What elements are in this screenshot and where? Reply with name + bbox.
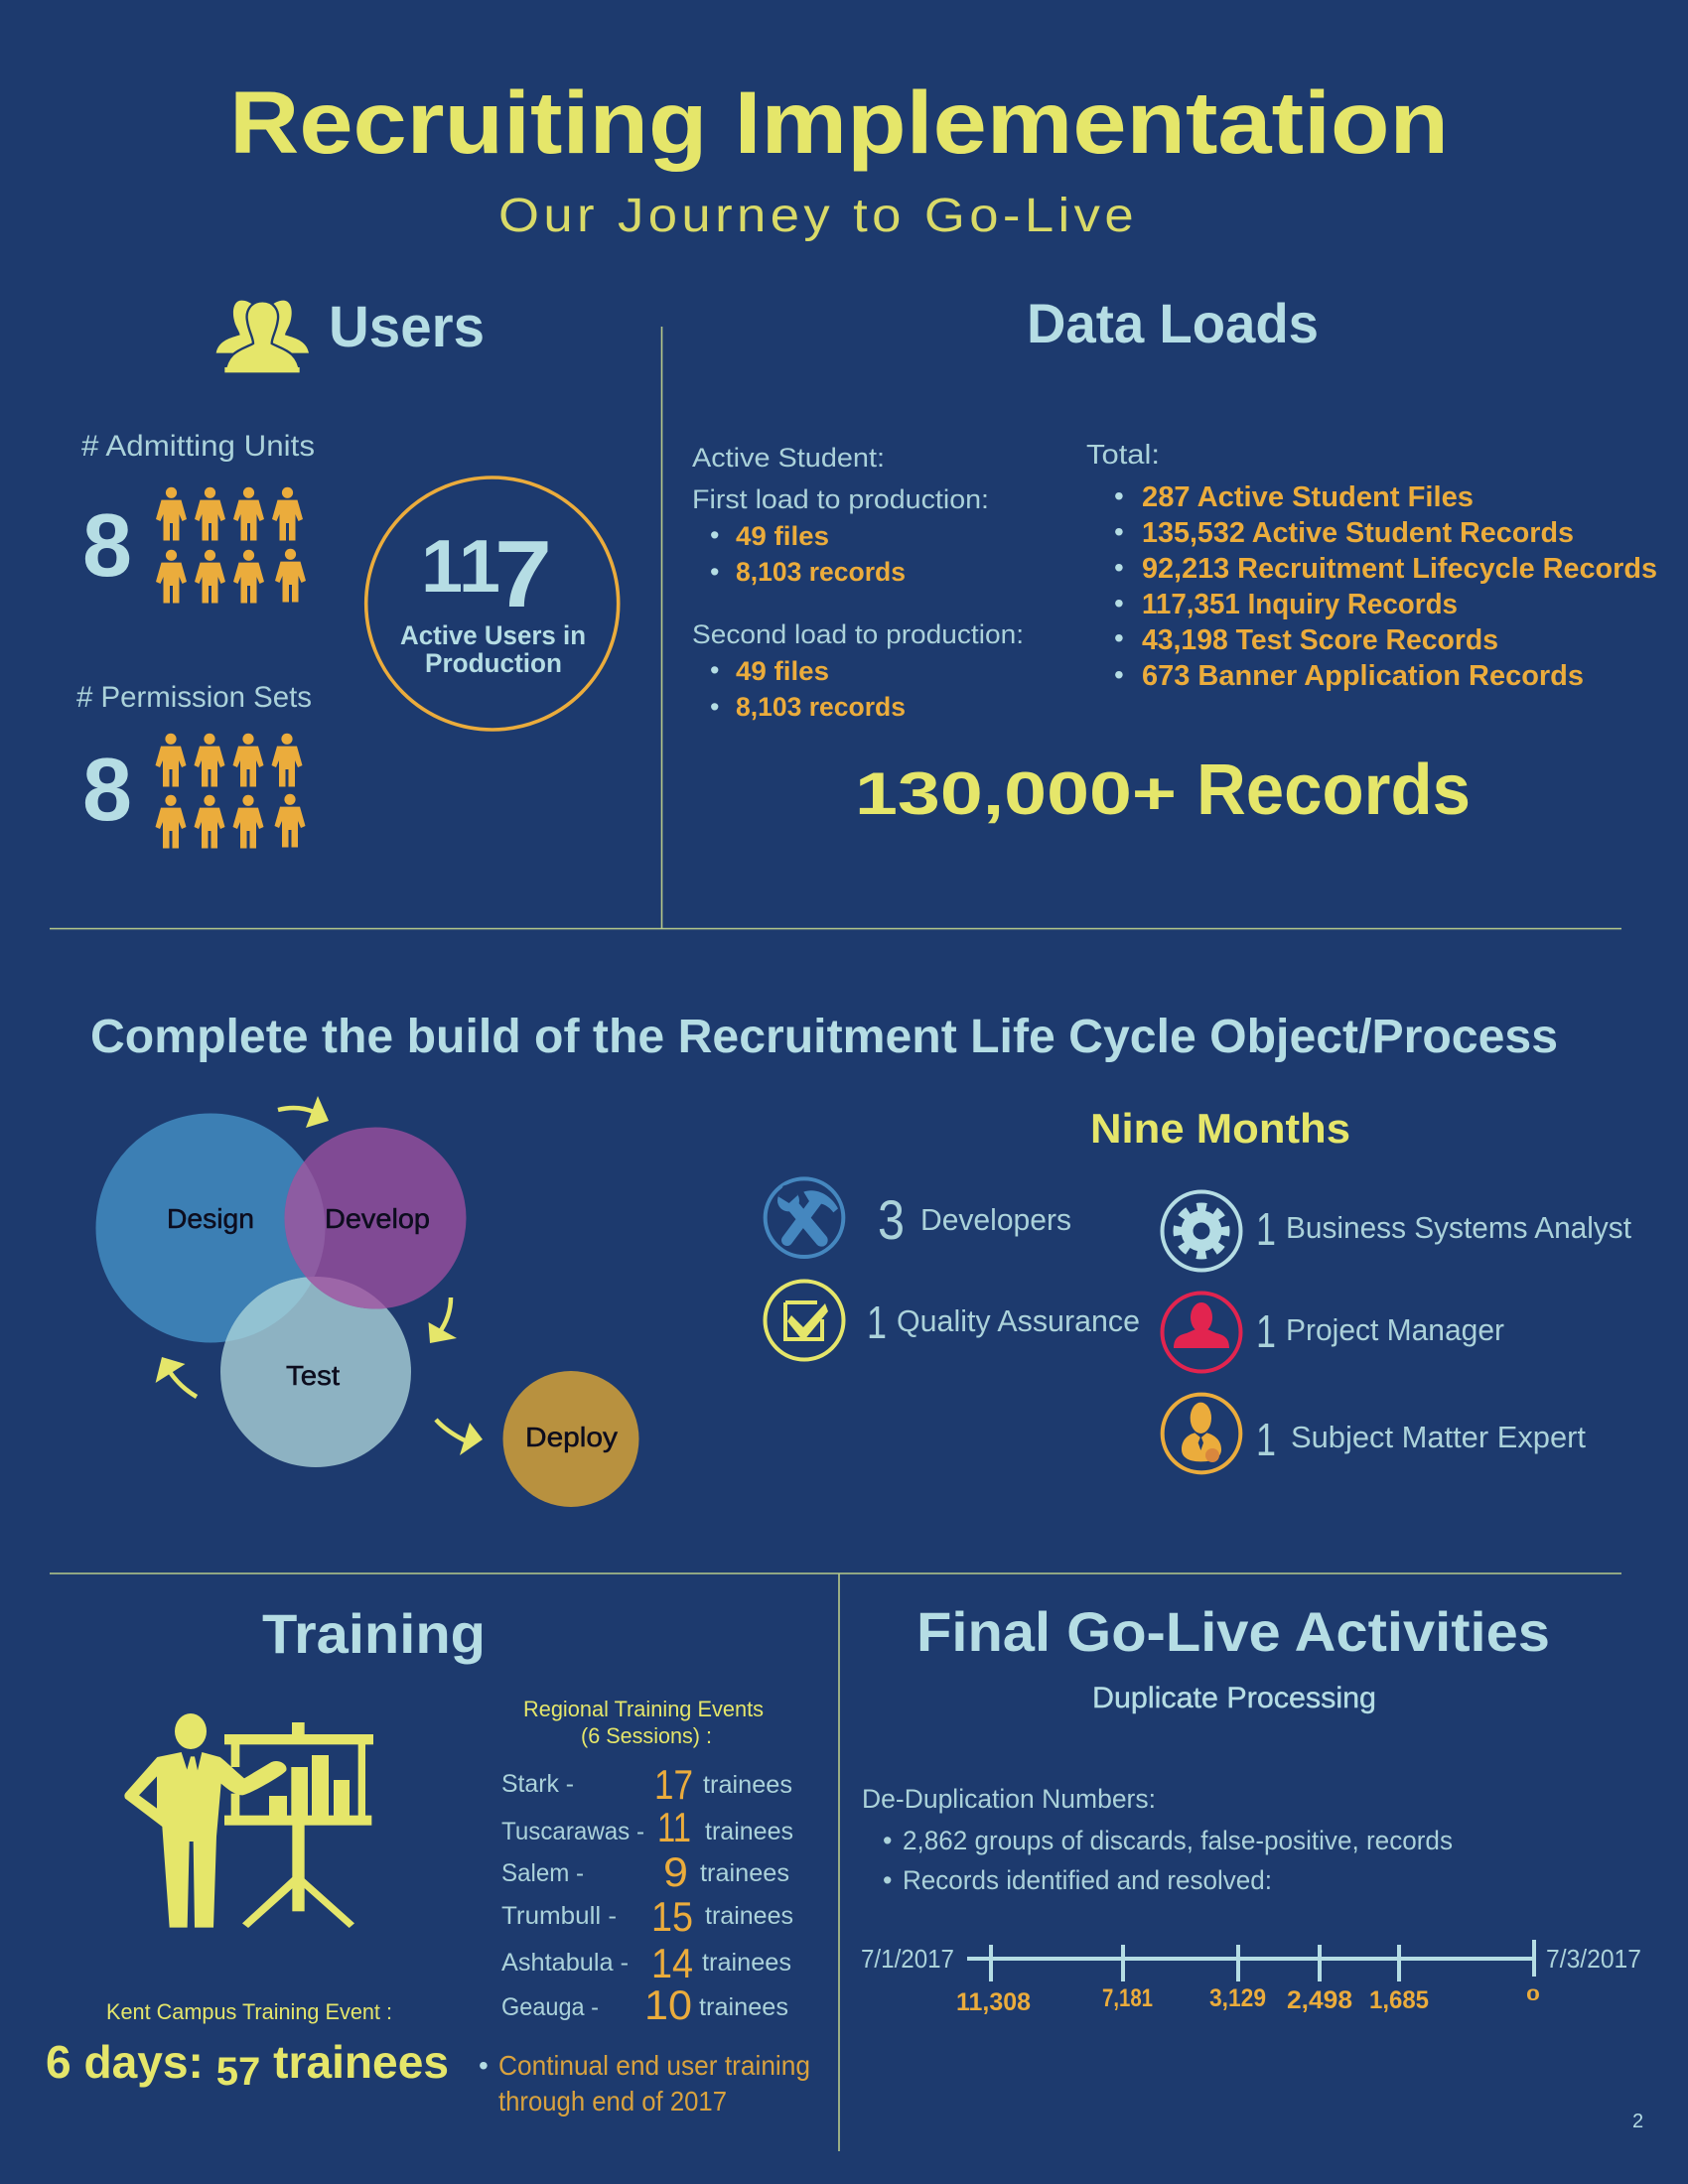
text block: active student: •	[710, 557, 719, 587]
text block: active student	[692, 443, 1024, 722]
role: subject matter expert	[1256, 1414, 1586, 1465]
chart: timeline: 7/1/2017	[861, 1944, 954, 1974]
big number: records	[855, 751, 1471, 830]
circle: test	[220, 1277, 411, 1467]
subheading: duplicate processing: Duplicate Processing	[1092, 1682, 1376, 1714]
text block: totals: 117,351 Inquiry Records	[1142, 589, 1458, 620]
heading: nine months: Nine Months	[1090, 1105, 1350, 1152]
overlap: design and test	[225, 1277, 312, 1342]
kent campus label: Kent Campus Training Event :	[106, 1999, 392, 2024]
table: regional sessions: Trumbull -	[501, 1902, 617, 1930]
text block: totals: 673 Banner Application Records	[1142, 660, 1584, 692]
note: continual training: Continual end user training	[498, 2050, 810, 2081]
text block: active student: •	[710, 692, 719, 722]
role: quality assurance	[867, 1297, 1140, 1348]
page number: 2	[1632, 2111, 1643, 2132]
overlap: design and develop	[284, 1161, 326, 1283]
heading: users: Users	[329, 295, 485, 359]
number: permission sets: 8	[82, 741, 132, 840]
icon: project manager	[1162, 1293, 1241, 1372]
text block: de-duplication: •	[883, 1865, 892, 1895]
text block: de-duplication: •	[883, 1826, 892, 1855]
big number: records: Records	[1196, 751, 1471, 830]
arrow: develop to test	[429, 1297, 457, 1343]
table: regional sessions	[501, 1761, 793, 2028]
panel: team	[765, 1105, 1631, 1472]
text block: de-duplication: De-Duplication Numbers:	[862, 1784, 1156, 1814]
regional events heading: Regional Training Events	[523, 1697, 764, 1721]
venn labels: Deploy	[525, 1422, 618, 1452]
chart: timeline: 0	[1526, 1985, 1540, 2004]
role: quality assurance: Quality Assurance	[897, 1303, 1140, 1338]
table: regional sessions: trainees	[705, 1902, 793, 1930]
text block: totals: 135,532 Active Student Records	[1142, 517, 1574, 549]
table: regional sessions: Ashtabula -	[501, 1949, 629, 1977]
chart: timeline: 3,129	[1209, 1984, 1266, 2012]
table: regional sessions: trainees	[703, 1771, 792, 1799]
number: admitting units: 8	[82, 496, 132, 596]
table: regional sessions: 11	[657, 1804, 691, 1850]
table: regional sessions: trainees	[705, 1818, 793, 1845]
table: regional sessions: Stark -	[501, 1770, 574, 1798]
big number: kent campus: 57	[216, 2050, 260, 2094]
icon: gear	[1162, 1191, 1241, 1271]
chart: timeline: 7,181	[1102, 1984, 1153, 2012]
table: regional sessions: Geauga -	[501, 1993, 599, 2021]
chart: timeline: 2,498	[1287, 1986, 1352, 2014]
text block: totals: Total:	[1086, 439, 1160, 470]
regional events heading	[523, 1697, 764, 1748]
role: quality assurance: 1	[867, 1297, 887, 1348]
circle: design	[95, 1114, 326, 1342]
icon: developers tools	[766, 1178, 843, 1257]
table: regional sessions: trainees	[702, 1949, 791, 1977]
text block: active student: Second load to production:	[692, 619, 1024, 649]
heading: recruitment life cycle: Complete the build of the Recruitment Life Cycle Object/Process	[90, 1011, 1558, 1063]
table: regional sessions: 15	[651, 1893, 693, 1940]
role: developers: 3	[878, 1188, 905, 1251]
text block: totals: 287 Active Student Files	[1142, 481, 1474, 513]
panel: data loads	[692, 292, 1657, 830]
panel: final go-live	[861, 1600, 1641, 2016]
role: project manager	[1256, 1305, 1504, 1357]
pictogram: permission sets	[155, 734, 306, 848]
text block: totals: •	[1114, 480, 1124, 511]
text block: active student: 8,103 records	[736, 557, 906, 587]
big number: kent campus: trainees	[260, 2036, 449, 2088]
icon: quality assurance check	[765, 1281, 844, 1360]
regional events heading: (6 Sessions) :	[581, 1723, 712, 1748]
role: project manager: Project Manager	[1286, 1312, 1504, 1347]
text block: totals: 92,213 Recruitment Lifecycle Records	[1142, 553, 1657, 585]
note: continual training: •	[479, 2050, 489, 2081]
arrow: design to develop	[278, 1096, 329, 1128]
role: developers: Developers	[920, 1202, 1071, 1237]
arrow: test to deploy	[436, 1420, 483, 1455]
text block: totals: 43,198 Test Score Records	[1142, 624, 1498, 656]
role: subject matter expert: 1	[1256, 1414, 1276, 1465]
text block: totals: •	[1114, 516, 1124, 547]
heading: training: Training	[262, 1602, 486, 1665]
big number: kent campus: 6 days:	[46, 2036, 204, 2088]
table: regional sessions: trainees	[700, 1859, 789, 1887]
role: business systems analyst	[1256, 1203, 1631, 1255]
venn labels: Develop	[325, 1203, 430, 1234]
text block: totals	[1086, 439, 1657, 692]
icon: presenter	[124, 1713, 373, 1928]
table: regional sessions: trainees	[699, 1993, 788, 2021]
admitting units label: # Admitting Units	[81, 430, 315, 463]
chart: timeline: 1,685	[1369, 1986, 1429, 2014]
text block: active student: First load to production:	[692, 484, 989, 514]
chart: life cycle venn	[95, 1096, 639, 1507]
table: regional sessions: Salem -	[501, 1859, 584, 1887]
note: continual training	[479, 2050, 810, 2116]
big number: records: 130,000+	[855, 760, 1177, 827]
text block: totals: •	[1114, 552, 1124, 583]
venn labels: Test	[286, 1360, 340, 1391]
table: regional sessions: 14	[651, 1940, 693, 1986]
chart: timeline: 11,308	[956, 1988, 1031, 2016]
callout: active users: Active Users in	[400, 620, 586, 650]
text block: de-duplication	[862, 1784, 1453, 1895]
table: regional sessions: 9	[663, 1848, 688, 1895]
venn labels	[167, 1203, 618, 1452]
callout: active users: Production	[425, 648, 562, 678]
callout: active users: 7	[494, 521, 552, 627]
text block: active student: •	[710, 520, 719, 550]
role: business systems analyst: 1	[1256, 1203, 1276, 1255]
heading: final go-live: Final Go-Live Activities	[916, 1600, 1550, 1663]
venn labels: Design	[167, 1203, 254, 1234]
role: business systems analyst: Business Systems Analyst	[1286, 1210, 1631, 1245]
text block: active student: 49 files	[736, 656, 829, 686]
table: regional sessions: 10	[644, 1981, 692, 2028]
text block: totals: •	[1114, 622, 1124, 653]
note: continual training: through end of 2017	[498, 2086, 727, 2116]
table: regional sessions: Tuscarawas -	[501, 1818, 644, 1845]
callout: active users	[366, 478, 619, 730]
text block: active student: •	[710, 655, 719, 685]
text block: active student: Active Student:	[692, 443, 885, 473]
text block: totals: •	[1114, 659, 1124, 690]
heading: data loads: Data Loads	[1027, 292, 1319, 354]
role: subject matter expert: Subject Matter Expert	[1291, 1420, 1586, 1454]
text block: totals: •	[1114, 588, 1124, 618]
circle: develop	[284, 1128, 467, 1308]
permission sets label: # Permission Sets	[76, 681, 312, 714]
table: regional sessions: 17	[654, 1761, 693, 1808]
panel: training	[46, 1602, 810, 2116]
callout: active users: 11	[421, 524, 500, 608]
arrow: test to design	[156, 1357, 197, 1397]
role: project manager: 1	[1256, 1305, 1276, 1357]
title: Recruiting Implementation	[229, 72, 1449, 172]
text block: de-duplication: Records identified and resolved:	[903, 1865, 1272, 1895]
text block: active student: 49 files	[736, 521, 829, 551]
icon: subject matter expert	[1163, 1395, 1240, 1472]
overlap: test and develop	[306, 1277, 387, 1308]
text block: active student: 8,103 records	[736, 692, 906, 722]
icon: users	[216, 301, 309, 372]
pictogram: admitting units	[156, 487, 306, 604]
subtitle: Our Journey to Go-Live	[498, 190, 1138, 242]
circle: deploy	[502, 1371, 639, 1507]
chart: timeline: 7/3/2017	[1546, 1944, 1641, 1974]
panel: users	[76, 295, 619, 848]
text block: de-duplication: 2,862 groups of discards, false-positive, records	[903, 1826, 1453, 1855]
role: developers	[878, 1188, 1071, 1251]
chart: timeline	[861, 1940, 1641, 2016]
